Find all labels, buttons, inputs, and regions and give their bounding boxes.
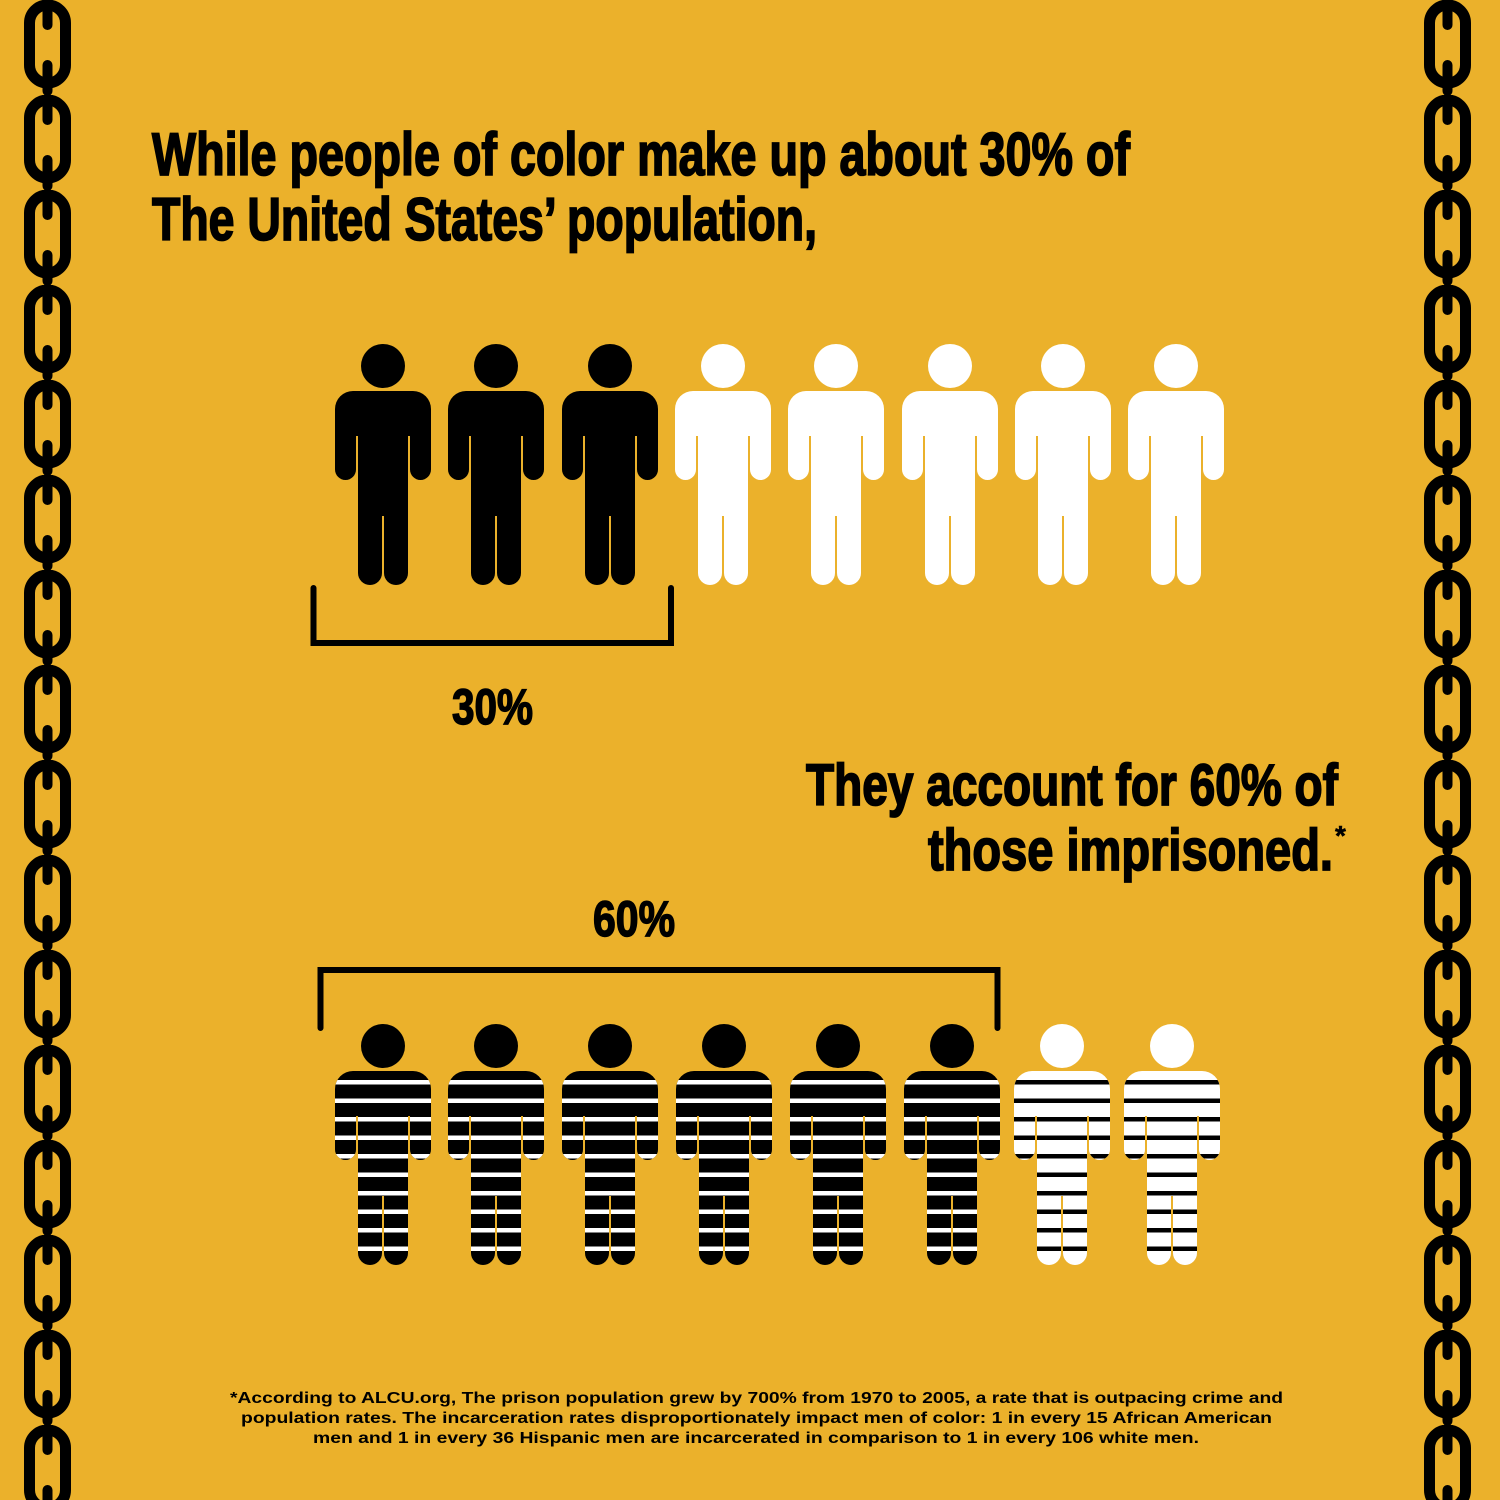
label 30%: 30% xyxy=(452,679,533,735)
second heading xyxy=(806,753,1346,883)
bracket 60% xyxy=(320,970,998,1028)
population figures row xyxy=(335,344,1224,585)
footnote: population rates. The incarceration rates disproportionately impact men of color: 1 in every 15 African American xyxy=(241,1410,1272,1427)
prisoner figures row xyxy=(335,1024,1220,1265)
left chain border xyxy=(0,0,100,1500)
second heading: * xyxy=(1335,820,1346,851)
label 60%: 60% xyxy=(593,891,675,947)
title: The United States’ population, xyxy=(152,186,817,253)
second heading: those imprisoned. xyxy=(928,818,1333,883)
right chain border xyxy=(1400,0,1500,1500)
footnote: men and 1 in every 36 Hispanic men are incarcerated in comparison to 1 in every 106 white men. xyxy=(313,1430,1199,1447)
footnote xyxy=(230,1390,1283,1447)
second heading: They account for 60% of xyxy=(806,753,1339,818)
footnote: *According to ALCU.org, The prison population grew by 700% from 1970 to 2005, a rate that is outpacing crime and xyxy=(230,1390,1283,1407)
title: While people of color make up about 30% of xyxy=(152,121,1131,188)
title xyxy=(152,121,1131,253)
bracket 30% xyxy=(314,588,671,643)
